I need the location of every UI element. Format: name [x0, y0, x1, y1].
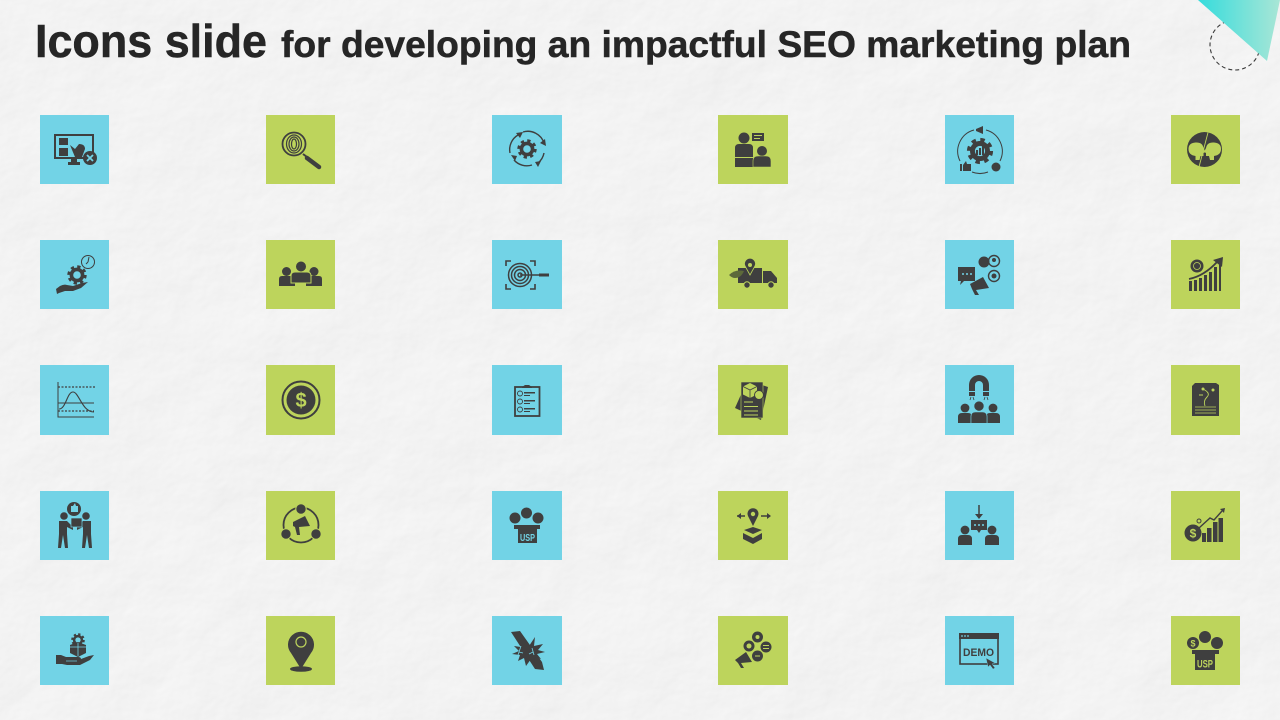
title: Icons slide: [35, 15, 267, 67]
tile: location box: [718, 491, 788, 560]
tile: two people exchanging box: [40, 491, 109, 560]
tile: gear with cycle arrows: [492, 115, 562, 184]
tile: arrow to chat and people: [945, 491, 1014, 560]
teal corner triangle: [1198, 0, 1280, 61]
icon: growth bars: [1189, 257, 1223, 291]
tile: target and dart: [492, 240, 562, 309]
icon: gear ring: [958, 126, 1002, 174]
icon: megaphone bubbles: [958, 256, 1000, 295]
tile: two heads in circle: [1171, 115, 1240, 184]
tile: three people: [266, 240, 335, 309]
tile: two people at a desk: [718, 115, 788, 184]
icon: team: [279, 262, 322, 286]
icon grid: [40, 115, 1240, 685]
title: [35, 15, 1131, 67]
tile: megaphone with circles: [718, 616, 788, 685]
tile: dollar coin: [266, 365, 335, 435]
tile: product documents: [718, 365, 788, 435]
tile: megaphone with bubbles: [945, 240, 1014, 309]
dashed circle decoration: [1210, 20, 1260, 70]
tile: strategy document: [1171, 365, 1240, 435]
icon: exchange: [58, 502, 92, 548]
icon: strategy doc: [1192, 383, 1219, 416]
icon: heads: [1187, 132, 1222, 167]
icon: collaboration: [958, 505, 999, 545]
title: for developing an impactful SEO marketing plan: [281, 24, 1131, 65]
tile: USP podium blue: [492, 491, 562, 560]
tile: map pin: [266, 616, 335, 685]
icon: magnet: [958, 375, 1000, 423]
tile: fingerprint magnifier: [266, 115, 335, 184]
tile: magnet attracting people: [945, 365, 1014, 435]
icon: ring megaphone: [281, 504, 321, 542]
icon: dollar coin: $: [295, 390, 307, 412]
icon: USP: [1187, 631, 1223, 670]
tile: delivery truck: [718, 240, 788, 309]
icon: documents: [735, 382, 768, 420]
icon: target: [506, 261, 549, 289]
tile: USP podium green: [1171, 616, 1240, 685]
icon: megaphone: [735, 632, 772, 668]
icon: monitor: [55, 135, 97, 165]
tile: money bag and growth: [1171, 491, 1240, 560]
icon: USP: USP: [1197, 658, 1213, 670]
tile: demo browser window: [945, 616, 1014, 685]
tile: megaphone in ring: [266, 491, 335, 560]
tile: growth chart with coin: [1171, 240, 1240, 309]
icon: hand gear: [56, 256, 94, 294]
icon: truck: [729, 258, 777, 288]
tile: hand holding box: [40, 616, 109, 685]
icon: bell curve: [58, 382, 95, 417]
icon: pin box: [737, 508, 771, 544]
icon: gear cycle: [510, 131, 546, 167]
icon: clipboard: [515, 385, 540, 416]
tile: hand with gear and clock: [40, 240, 109, 309]
icon: burst: [511, 631, 545, 670]
tile: burst and broken chain: [492, 616, 562, 685]
tile: monitor with blocked content: [40, 115, 109, 184]
icon: magnifier: [282, 132, 319, 167]
icon: desk meeting: [735, 132, 771, 167]
icon: USP: $: [1190, 638, 1196, 648]
tile: analytics gear ring: [945, 115, 1014, 184]
icon: USP: USP: [520, 533, 535, 544]
icon: hand box: [56, 634, 94, 665]
icon: location pin: [288, 632, 314, 672]
tile: bell curve chart: [40, 365, 109, 435]
icon: demo window: DEMO: [963, 647, 994, 659]
tile: checklist clipboard: [492, 365, 562, 435]
icon: revenue growth: $: [1190, 526, 1197, 540]
